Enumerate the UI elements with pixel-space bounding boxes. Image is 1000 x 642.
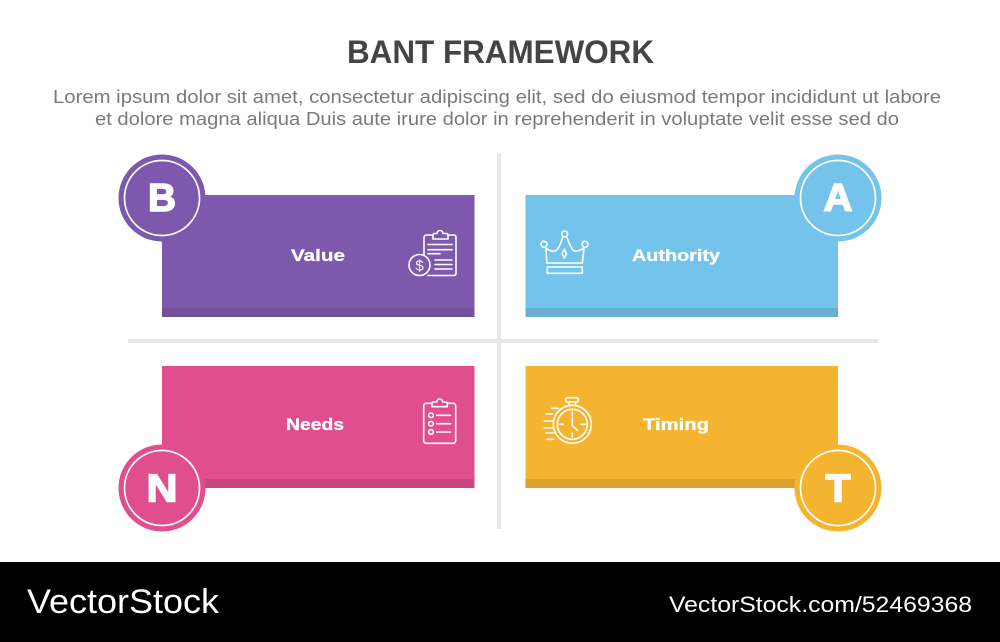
- subtitle text: et dolore magna aliqua Duis aute irure dolor in reprehenderit in voluptate velit esse sed do: [95, 108, 899, 129]
- icon: clipboard with dollar coin: $: [415, 258, 424, 274]
- icon: checklist clipboard: [424, 399, 456, 443]
- brand logo text: VectorStock: [27, 583, 220, 621]
- panel: Needs: [118, 366, 474, 532]
- subtitle text: Lorem ipsum dolor sit amet, consectetur adipiscing elit, sed do eiusmod tempor incididunt ut labore: [53, 86, 941, 107]
- footer bar: [0, 562, 1000, 642]
- label: Needs: Needs: [286, 415, 344, 434]
- icon: crown: [541, 231, 588, 273]
- letter A: A: [824, 177, 852, 220]
- label: Value: Value: [291, 246, 345, 265]
- panel: Timing: [526, 366, 882, 532]
- letter T: T: [826, 468, 851, 510]
- panel: Authority: [526, 154, 882, 317]
- icon: stopwatch: [544, 398, 591, 443]
- icon: clipboard with dollar coin: [409, 230, 456, 276]
- subtitle text: [53, 86, 941, 129]
- label: Authority: Authority: [632, 246, 721, 265]
- letter B: B: [148, 177, 176, 220]
- title: BANT FRAMEWORK: [347, 34, 654, 70]
- letter N: N: [146, 468, 178, 510]
- panel: Value: [118, 154, 474, 317]
- label: Timing: Timing: [643, 415, 709, 434]
- image url text: VectorStock.com/52469368: [669, 592, 972, 617]
